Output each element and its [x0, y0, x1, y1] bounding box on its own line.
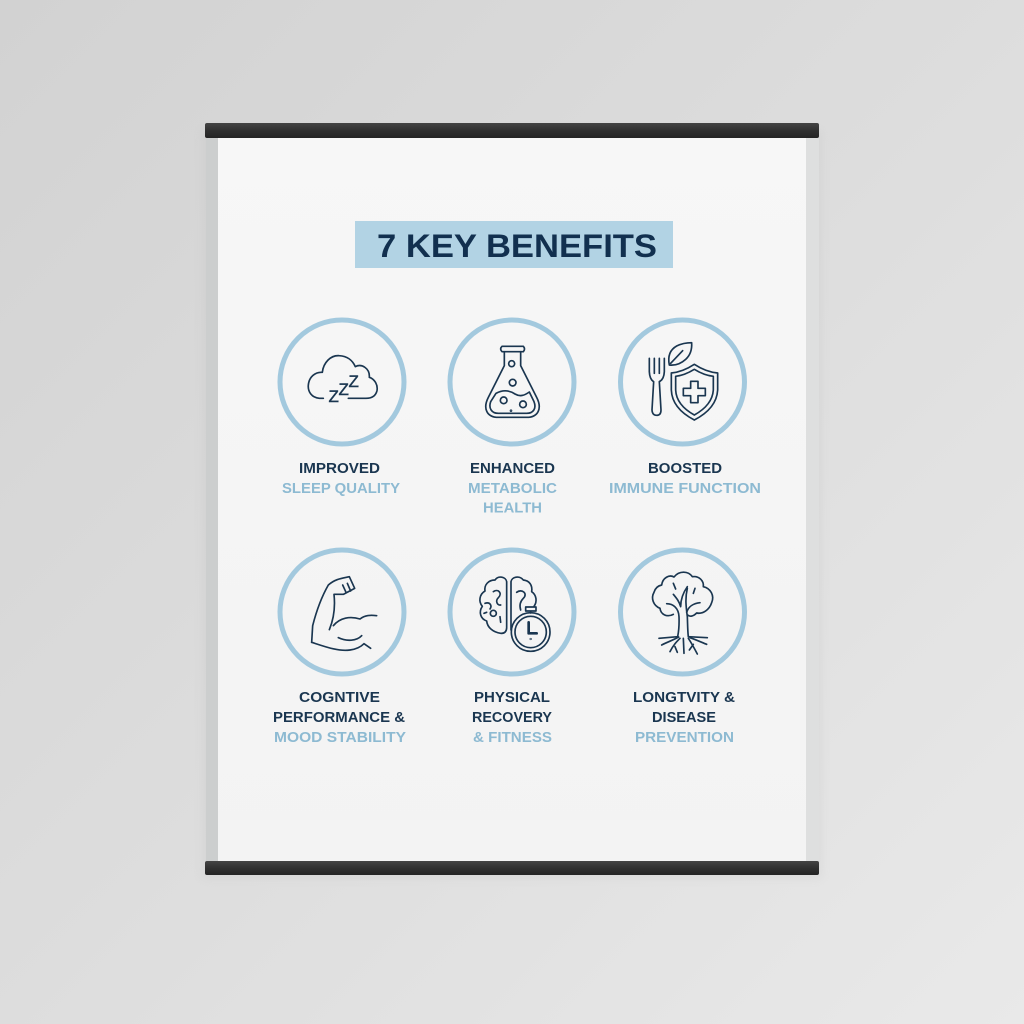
label: METABOLIC: [468, 481, 558, 497]
label: PERFORMANCE &: [273, 710, 406, 726]
bottom rail: [205, 861, 819, 875]
label: BOOSTED: [648, 461, 722, 477]
icon: tree with roots: [653, 572, 713, 654]
benefit: enhanced metabolic health: [450, 320, 574, 516]
title background: [355, 221, 673, 268]
label: PHYSICAL: [474, 690, 550, 706]
benefit: boosted immune function: [609, 320, 761, 497]
ring: [280, 550, 404, 674]
label: RECOVERY: [472, 710, 552, 726]
icon: flexed arm: [312, 577, 377, 650]
icon: brain and stopwatch: [480, 577, 550, 651]
benefit: physical recovery and fitness: [450, 550, 574, 746]
ring: [280, 320, 404, 444]
label: COGNTIVE: [299, 690, 380, 706]
benefit: improved sleep quality: [280, 320, 404, 497]
label: IMMUNE FUNCTION: [609, 481, 761, 497]
label: SLEEP QUALITY: [282, 481, 400, 497]
label: HEALTH: [483, 500, 542, 516]
ring: [450, 550, 574, 674]
icon: cloud with zzz: [308, 356, 377, 406]
label: [609, 461, 761, 497]
right edge strip: [806, 138, 819, 861]
label: & FITNESS: [473, 730, 552, 746]
label: MOOD STABILITY: [274, 730, 406, 746]
poster: [203, 123, 821, 878]
icon: cloud with zzz: Z: [338, 380, 349, 399]
label: [273, 690, 406, 746]
ring: [450, 320, 574, 444]
title banner: [355, 221, 673, 268]
label: PREVENTION: [635, 730, 734, 746]
icon: cloud with zzz: Z: [328, 387, 339, 406]
label: [472, 690, 552, 746]
label: IMPROVED: [299, 461, 380, 477]
label: LONGTVITY &: [633, 690, 736, 706]
label: [468, 461, 558, 516]
label: [282, 461, 400, 497]
paper sheet: [218, 138, 806, 861]
label: ENHANCED: [470, 461, 555, 477]
ring: [620, 550, 744, 674]
label: DISEASE: [652, 710, 716, 726]
title text: 7 KEY BENEFITS: [377, 228, 657, 264]
label: [633, 690, 736, 746]
top rail: [205, 123, 819, 138]
ring: [620, 320, 744, 444]
icon: flask: [486, 346, 539, 417]
benefit: longevity and disease prevention: [620, 550, 744, 746]
icon: cloud with zzz: Z: [348, 372, 359, 391]
benefit: cognitive performance and mood stability: [273, 550, 406, 746]
icon: fork, leaf and shield: [649, 343, 718, 420]
left edge strip: [206, 138, 218, 861]
poster shadow: [203, 130, 821, 878]
